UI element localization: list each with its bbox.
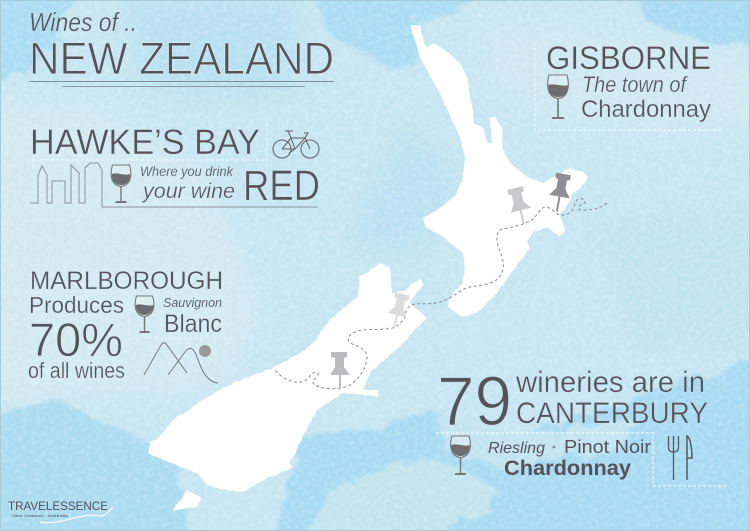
route: dotted path [275, 198, 607, 389]
text: 70%: 70% [29, 313, 123, 366]
title: Wines of New Zealand [29, 7, 334, 87]
panel: Canterbury [436, 362, 728, 486]
text: blanc: Blanc [164, 310, 222, 338]
title: Wines of New Zealand: NEW ZEALAND [29, 33, 334, 84]
text: RED: RED [243, 162, 320, 210]
text: riesling: Riesling [488, 440, 545, 457]
map: New Zealand [148, 25, 588, 510]
panel: Hawke's Bay [27, 123, 320, 210]
text: of all wines: of all wines [28, 358, 125, 383]
dashed frame [27, 123, 267, 160]
icon: fork and knife [668, 436, 692, 480]
panel: Gisborne [535, 40, 722, 130]
panel: Marlborough [20, 267, 250, 383]
icon: bicycle [273, 131, 319, 158]
text: chardonnay: Chardonnay [581, 96, 711, 123]
heading: HAWKE’S BAY [30, 123, 260, 162]
dashed frame [436, 433, 728, 486]
icon: city skyline [30, 163, 318, 207]
icon: wine glass [451, 436, 470, 475]
logo: TravelEssence [8, 501, 113, 523]
pin: Gisborne [547, 172, 574, 213]
heading: GISBORNE [546, 40, 711, 76]
text: pinot noir: Pinot Noir [564, 437, 651, 457]
logo: TravelEssence: New Zealand - Australia [12, 513, 69, 518]
pin: Marlborough [385, 292, 412, 330]
north island [410, 25, 588, 317]
text: 79: 79 [437, 362, 512, 440]
south island [148, 263, 427, 492]
dashed frame [20, 292, 250, 338]
pin: Hawke's Bay [505, 185, 535, 226]
icon: wine glass [548, 75, 568, 119]
text: sauvignon: Sauvignon [163, 295, 222, 310]
text: produces: Produces [29, 292, 124, 318]
text: the town of: The town of [582, 72, 689, 97]
icon: wine glass [135, 296, 154, 333]
text: where you drink: Where you drink [140, 163, 234, 179]
text: chardonnay: Chardonnay [504, 457, 631, 480]
stewart island [173, 490, 202, 510]
text: CANTERBURY: CANTERBURY [516, 397, 708, 430]
title: Wines of New Zealand: Wines of .. [29, 7, 137, 37]
dashed frame [535, 43, 722, 130]
logo: TravelEssence: TRAVELESSENCE [8, 501, 108, 513]
icon: mountains and sun [144, 343, 218, 383]
text: wineries are in: wineries are in [515, 366, 705, 399]
dot separator [553, 446, 555, 448]
pin: Canterbury [330, 352, 350, 387]
icon: wine glass [111, 165, 131, 203]
text: your wine: your wine [141, 180, 235, 203]
heading: MARLBOROUGH [30, 267, 223, 295]
